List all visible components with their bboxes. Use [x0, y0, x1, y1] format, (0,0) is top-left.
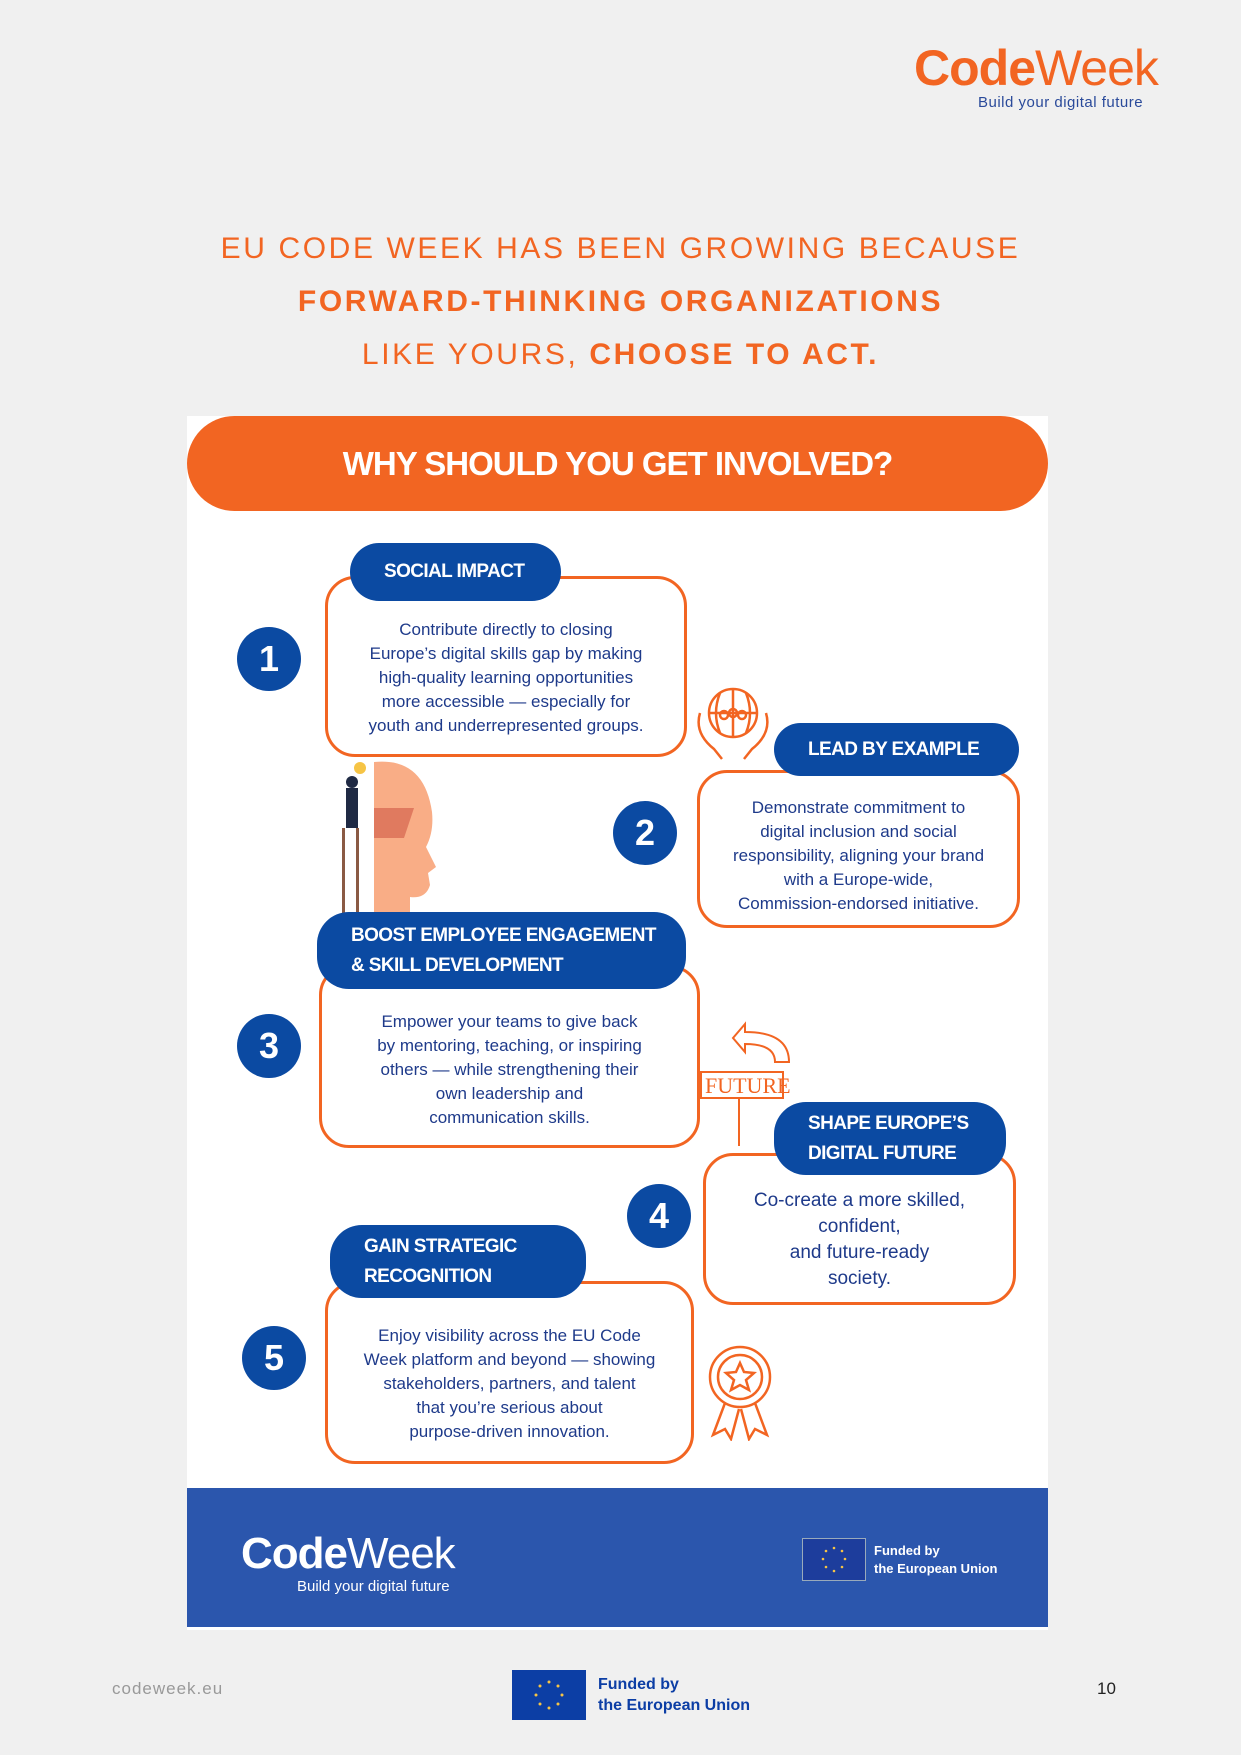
EU funding badge: [802, 1538, 998, 1581]
number 1: 1: [259, 638, 279, 679]
number 5: 5: [264, 1337, 284, 1378]
box 3: by mentoring, teaching, or inspiring: [377, 1036, 642, 1054]
pill 3: BOOST EMPLOYEE ENGAGEMENT: [351, 924, 656, 946]
box 1: youth and underrepresented groups.: [368, 716, 644, 734]
number 4: [627, 1184, 691, 1248]
box 2: Demonstrate commitment to: [752, 798, 965, 817]
icon: future sign: [700, 1021, 791, 1146]
box 4: Co-create a more skilled,: [754, 1190, 965, 1211]
box 4: society.: [828, 1268, 891, 1289]
footer: EU logo: Funded by: [598, 1676, 679, 1693]
pill 5: GAIN STRATEGIC: [364, 1236, 517, 1256]
pill 4: DIGITAL FUTURE: [808, 1142, 956, 1164]
pill 5: [330, 1225, 586, 1298]
logo: CodeWeek white: CodeWeek: [241, 1529, 455, 1578]
box 2: with a Europe-wide,: [784, 870, 933, 889]
pill 2: LEAD BY EXAMPLE: [808, 738, 979, 760]
page number: 10: [1097, 1679, 1116, 1698]
footer: url: codeweek.eu: [112, 1679, 223, 1698]
title: FORWARD-THINKING ORGANIZATIONS: [298, 285, 943, 318]
number 1: [237, 627, 301, 691]
icon: medal: [708, 1346, 772, 1441]
panel: infographic: [187, 416, 1048, 1630]
title: EU CODE WEEK HAS BEEN GROWING BECAUSE: [221, 232, 1020, 265]
box 2: digital inclusion and social: [760, 822, 957, 841]
number 3: 3: [259, 1025, 279, 1066]
footer band: [187, 1488, 1048, 1627]
box 2: [697, 770, 1020, 928]
box 3: communication skills.: [429, 1108, 590, 1126]
icon: globe in hands: [697, 688, 769, 760]
pill 1: SOCIAL IMPACT: [384, 561, 524, 582]
box 5: that you’re serious about: [416, 1398, 603, 1416]
box 1: high-quality learning opportunities: [379, 668, 633, 686]
box 1: [325, 576, 687, 757]
number 5: [242, 1326, 306, 1390]
pill 4: [774, 1102, 1006, 1175]
box 5: purpose-driven innovation.: [409, 1422, 610, 1440]
icon: future sign: FUTURE: [705, 1073, 791, 1098]
pill 3: [317, 912, 686, 989]
footer: EU logo: the European Union: [598, 1697, 750, 1714]
logo: CodeWeek white: Build your digital future: [297, 1578, 450, 1595]
box 5: Week platform and beyond — showing: [364, 1350, 655, 1368]
box 2: responsibility, aligning your brand: [733, 846, 984, 865]
pill 2: [774, 723, 1019, 776]
title: LIKE YOURS, CHOOSE TO ACT.: [362, 338, 879, 371]
box 1: Contribute directly to closing: [399, 620, 613, 638]
pill 3: & SKILL DEVELOPMENT: [351, 954, 563, 976]
number 3: [237, 1014, 301, 1078]
number 4: 4: [649, 1195, 669, 1236]
box 4: confident,: [818, 1216, 901, 1237]
box 5: [325, 1281, 694, 1464]
box 5: Enjoy visibility across the EU Code: [378, 1326, 641, 1344]
number 2: 2: [635, 812, 655, 853]
box 1: Europe’s digital skills gap by making: [370, 644, 642, 662]
header banner: WHY SHOULD YOU GET INVOLVED?: [343, 444, 892, 482]
box 3: [319, 965, 700, 1148]
box 5: stakeholders, partners, and talent: [383, 1374, 636, 1392]
logo: CodeWeek top right: CodeWeek: [914, 40, 1158, 96]
box 3: own leadership and: [436, 1084, 583, 1102]
illustration: head with ladder: [342, 762, 436, 913]
box 3: Empower your teams to give back: [381, 1012, 638, 1030]
box 4: and future-ready: [790, 1242, 929, 1263]
footer: EU logo: [512, 1670, 750, 1720]
logo: CodeWeek top right: Build your digital future: [978, 94, 1143, 111]
EU funding badge: Funded by: [874, 1543, 940, 1558]
box 4: [703, 1153, 1016, 1305]
title: [221, 232, 1020, 371]
box 2: Commission-endorsed initiative.: [738, 894, 979, 913]
number 2: [613, 801, 677, 865]
box 1: more accessible — especially for: [382, 692, 630, 710]
pill 4: SHAPE EUROPE’S: [808, 1112, 969, 1134]
pill 5: RECOGNITION: [364, 1266, 491, 1286]
header banner: [187, 416, 1048, 511]
EU funding badge: the European Union: [874, 1561, 998, 1576]
pill 1: [350, 543, 561, 601]
box 3: others — while strengthening their: [380, 1060, 638, 1078]
